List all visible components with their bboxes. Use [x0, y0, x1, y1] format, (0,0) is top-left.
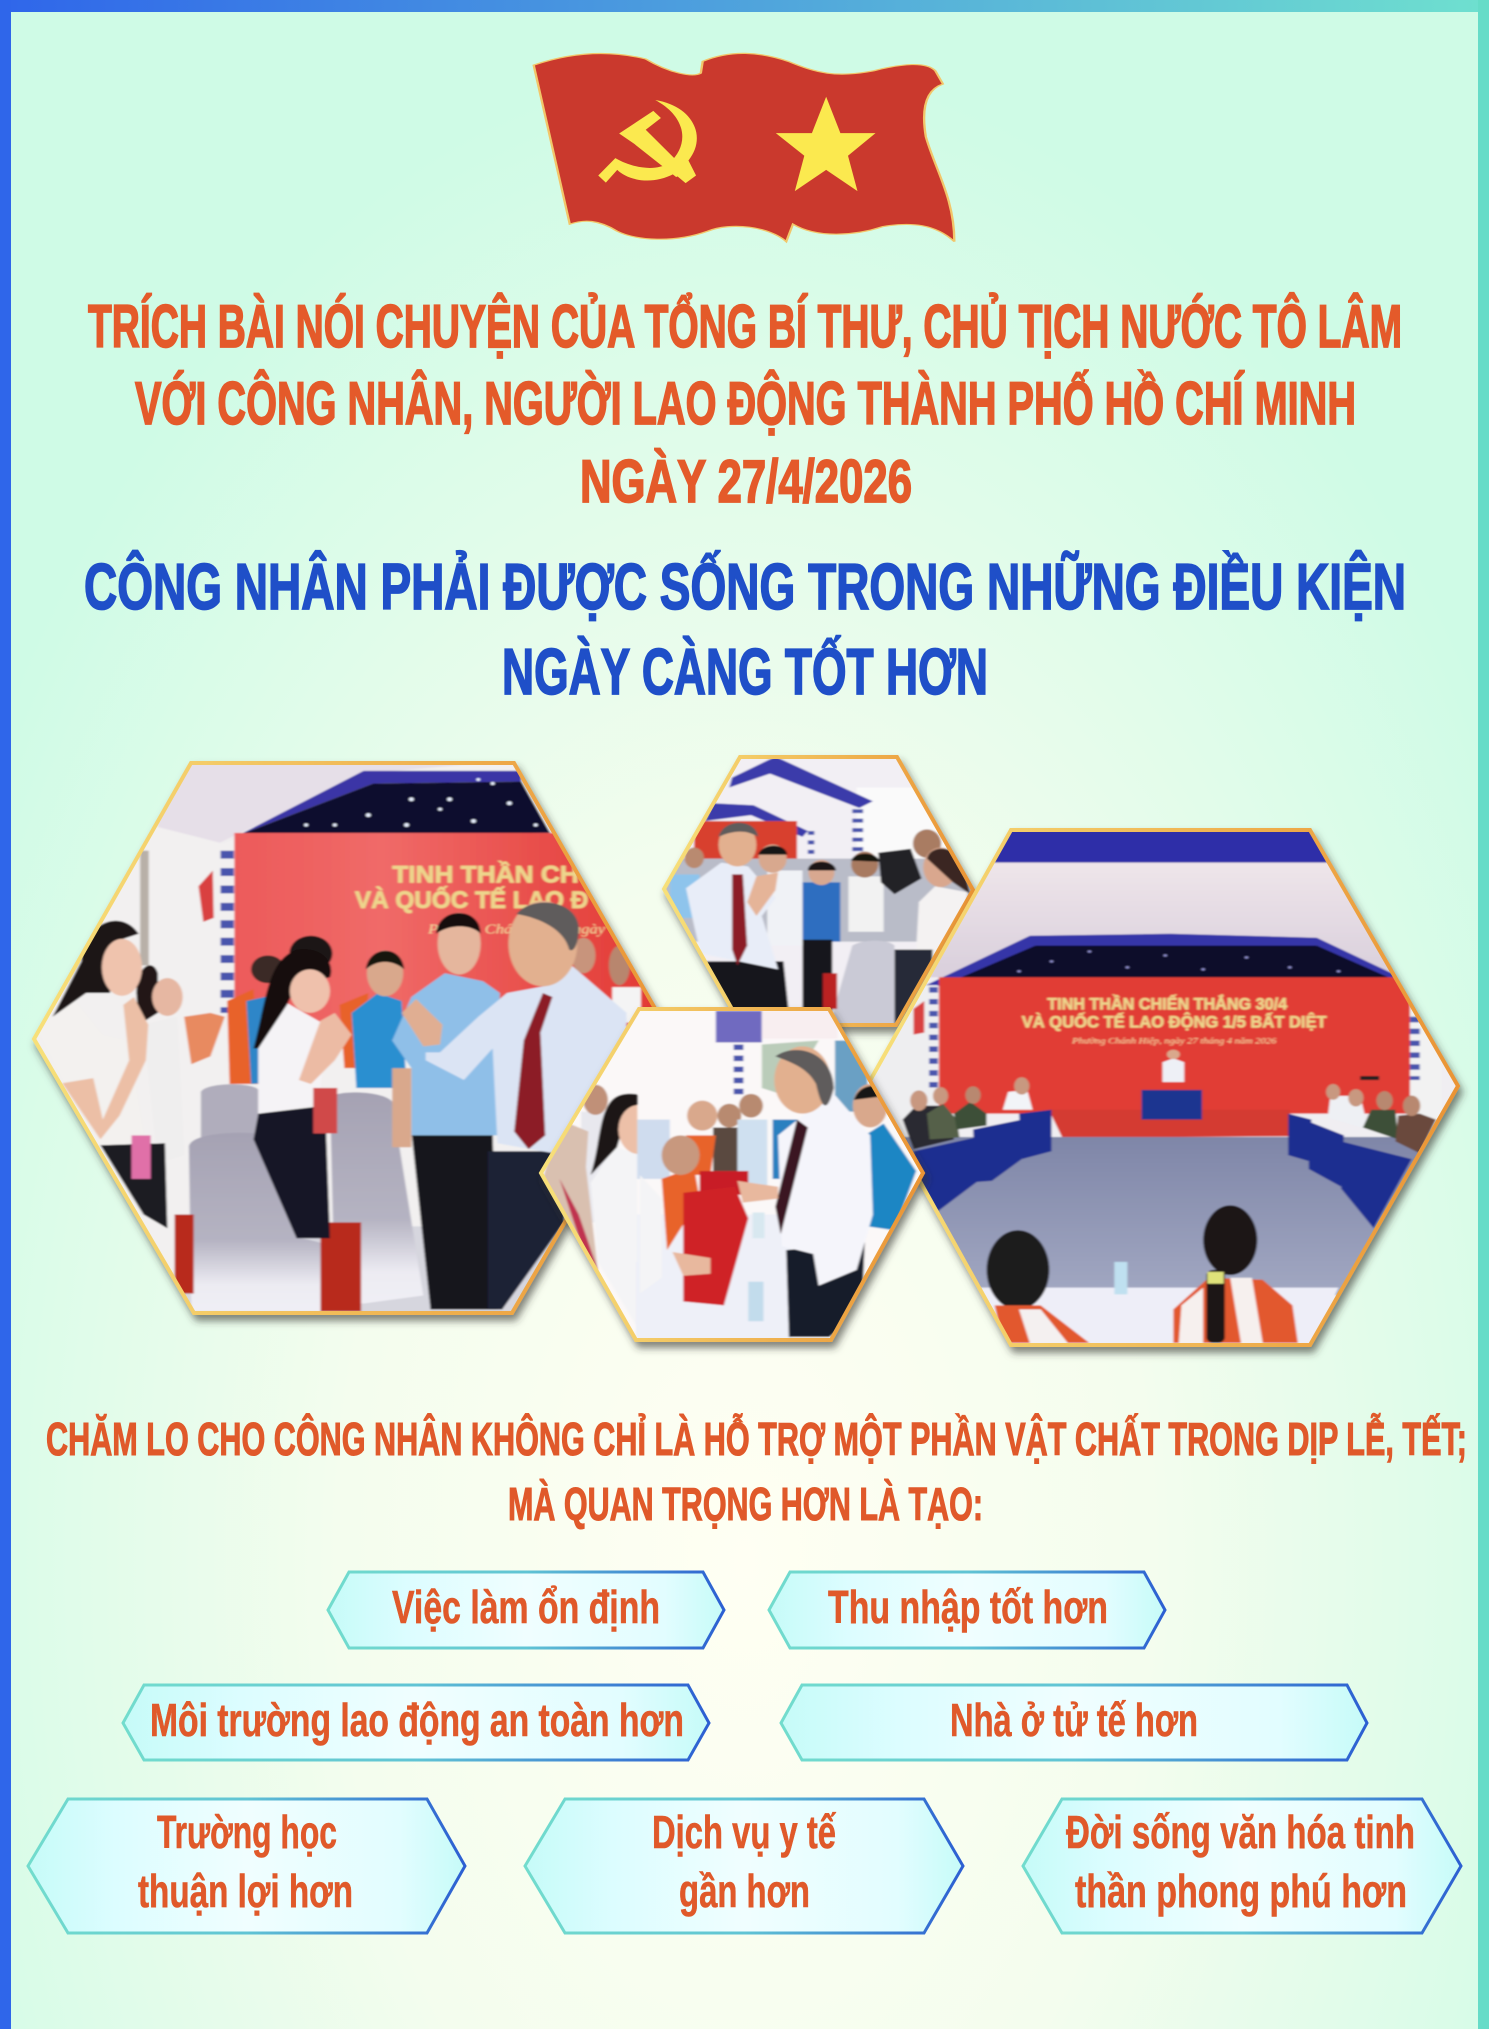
pill: richer cultural life: [1023, 1799, 1461, 1933]
pill: decent housing: [781, 1685, 1367, 1760]
seated attendees: [987, 1205, 1298, 1343]
photo: greeting workers (large hexagon): [30, 761, 663, 1327]
pill: convenient schools: thuận lợi hơn: [138, 1865, 353, 1917]
frame: right bar: [1478, 0, 1489, 2029]
pill: convenient schools: Trường học: [157, 1806, 337, 1858]
back crowd: [184, 936, 641, 1088]
heading: caring for workers: MÀ QUAN TRỌNG HƠN LÀ TẠO:: [508, 1478, 983, 1530]
frame: top bar: [0, 0, 1489, 12]
heading: main message: NGÀY CÀNG TỐT HƠN: [502, 635, 988, 708]
photo: greeting workers (large hexagon): Phường Chánh Hiệp, ngày: [427, 923, 605, 937]
photo: leader greeting delegates (small hexagon): [660, 755, 978, 1039]
man in checked shirt: [411, 1131, 497, 1309]
pill: convenient schools: [28, 1799, 465, 1933]
pill: better income: Thu nhập tốt hơn: [828, 1581, 1108, 1633]
photo: greeting workers (large hexagon): TINH THẦN CH: [392, 860, 579, 888]
title: speech source: NGÀY 27/4/2026: [580, 448, 912, 515]
photo: greeting workers (large hexagon): VÀ QUỐC TẾ LAO Đ: [355, 885, 588, 913]
pill: better income: [769, 1572, 1165, 1648]
frame: left bar: [0, 0, 11, 2029]
heading: caring for workers: [46, 1413, 1467, 1530]
delegates: [670, 829, 970, 1029]
pill: nearer health services: Dịch vụ y tế: [652, 1806, 836, 1858]
pill: stable jobs: [328, 1572, 724, 1648]
woman left: [143, 1017, 184, 1163]
crowd left: [544, 1084, 639, 1323]
pill: nearer health services: [525, 1799, 963, 1933]
leader: [488, 1151, 567, 1309]
woman center: [253, 1106, 330, 1238]
photo: gift giving (center hexagon): [536, 1005, 930, 1345]
pill: nearer health services: gần hơn: [679, 1865, 810, 1917]
pill: safer work environment: [123, 1685, 709, 1760]
photo: meeting hall (right hexagon): TINH THẦN CHIẾN THẮNG 30/4: [1047, 994, 1287, 1014]
title: speech source: [88, 293, 1402, 515]
crowd right: [637, 1046, 916, 1337]
photo: meeting hall (right hexagon): [857, 827, 1479, 1349]
icon: party flag: [534, 53, 954, 242]
heading: main message: [84, 550, 1406, 708]
photo: meeting hall (right hexagon): Phường Chánh Hiệp, ngày 27 tháng 4 năm 2026: [1071, 1037, 1277, 1046]
pill: stable jobs: Việc làm ổn định: [392, 1581, 660, 1633]
pill: decent housing: Nhà ở tử tế hơn: [950, 1694, 1198, 1746]
photo: meeting hall (right hexagon): VÀ QUỐC TẾ LAO ĐỘNG 1/5 BẤT DIỆT: [1022, 1012, 1327, 1032]
pill: safer work environment: Môi trường lao động an toàn hơn: [150, 1694, 684, 1746]
delegates and tables: [903, 1050, 1436, 1228]
chair front: [189, 1133, 337, 1311]
